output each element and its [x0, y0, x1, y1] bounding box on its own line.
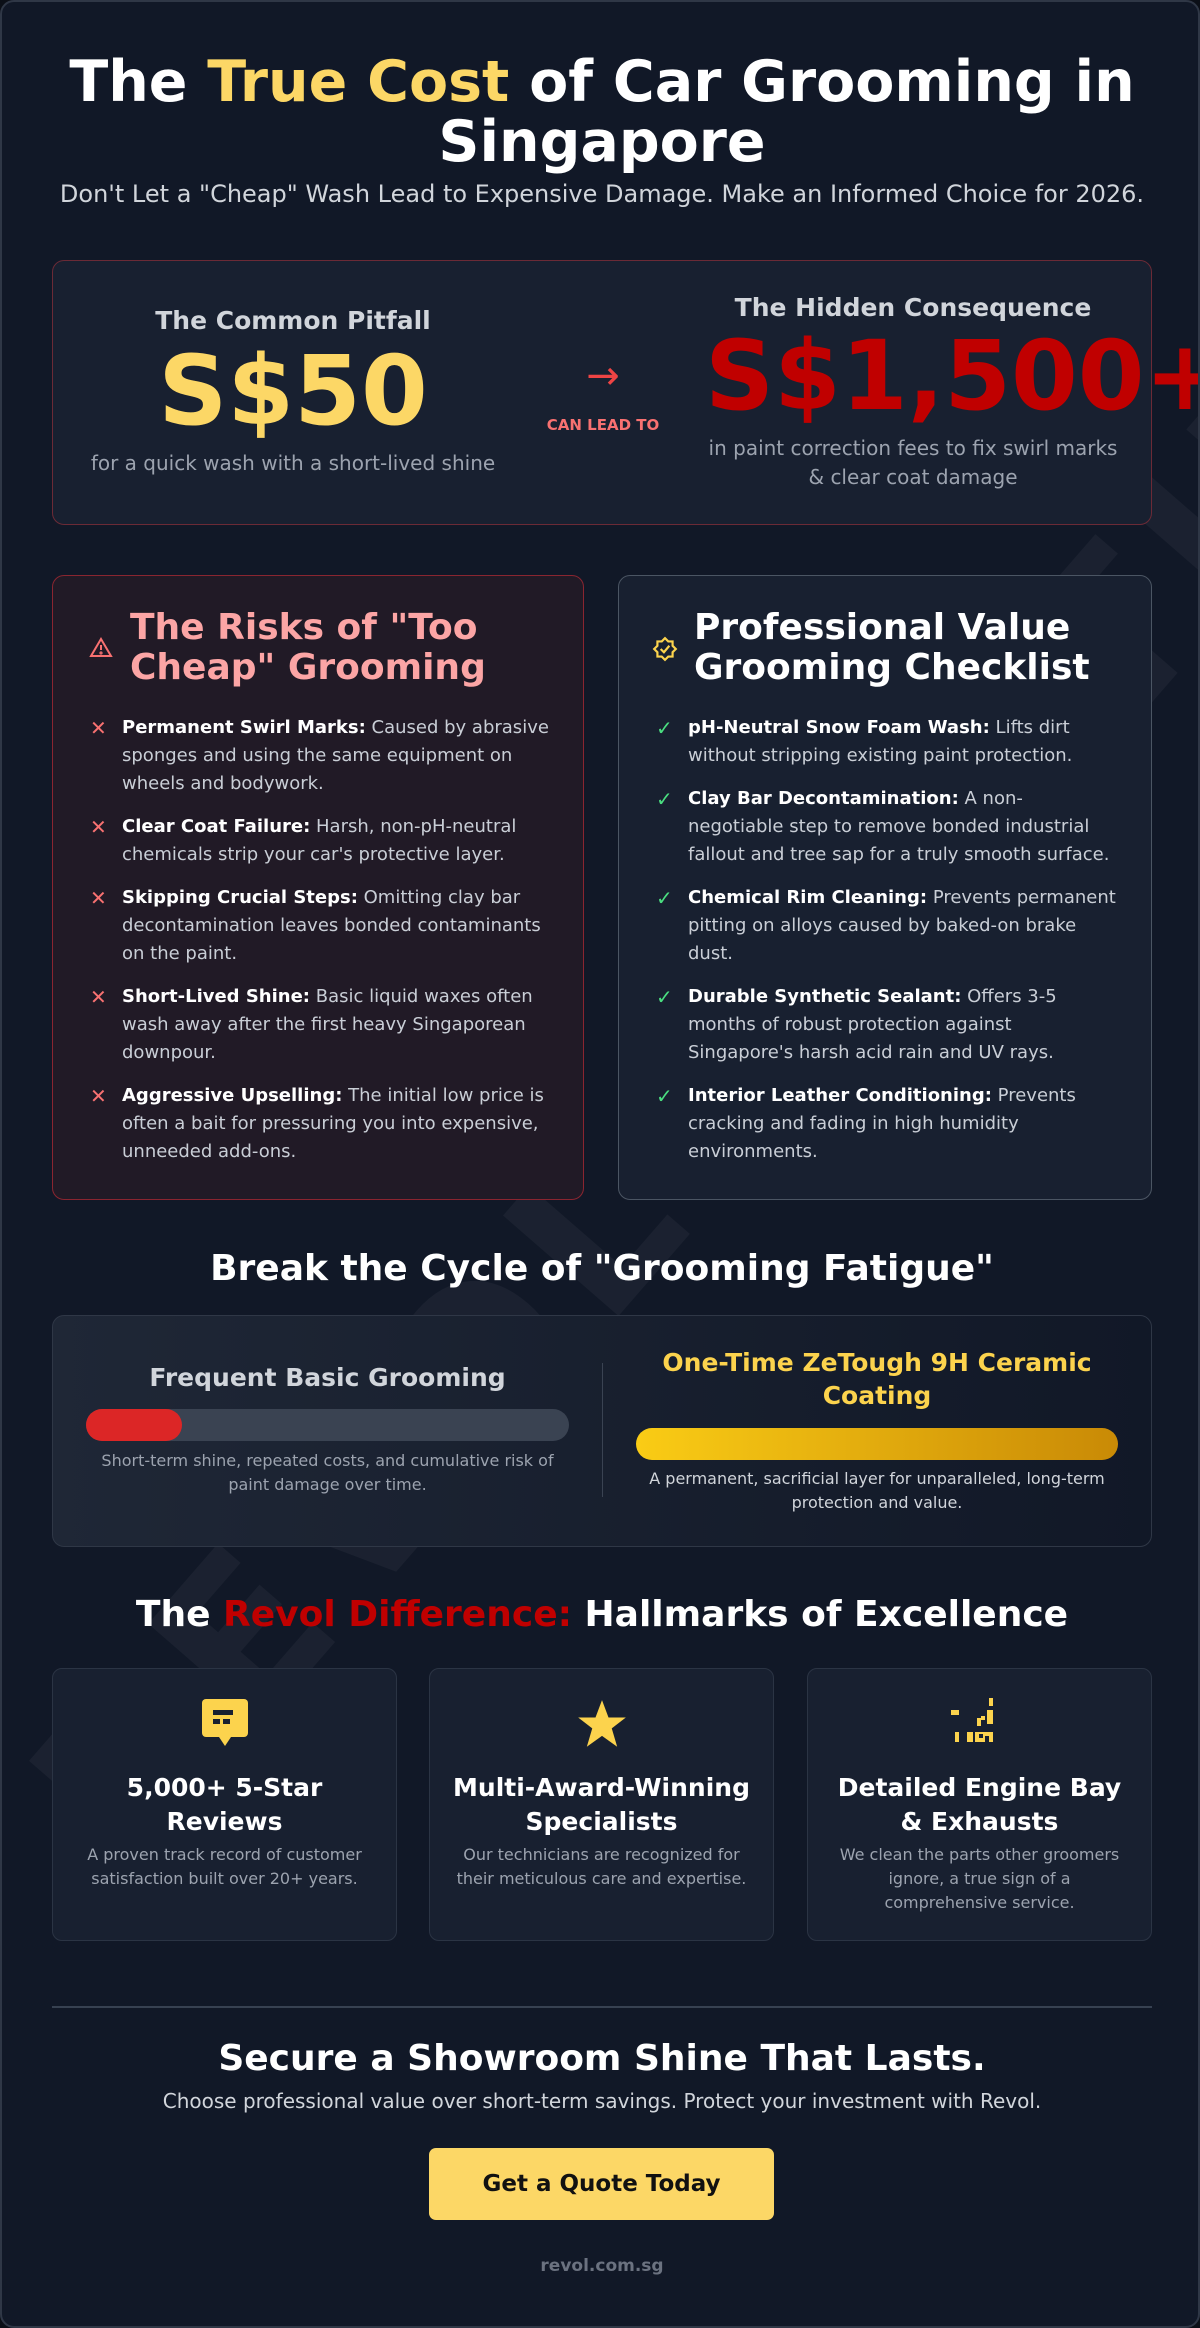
heading: risks — [130, 607, 486, 688]
card: reviews — [52, 1668, 397, 1941]
card: engine bay — [807, 1668, 1152, 1941]
heading: checklist: Professional Value — [694, 607, 1070, 648]
panel: checklist: ✓ — [656, 716, 673, 740]
footer url: revol.com.sg — [540, 2256, 664, 2276]
arrow: can lead to — [547, 353, 659, 434]
card: engine bay: We clean the parts other groomers ignore, a true sign of a comprehensive service. — [840, 1845, 1119, 1912]
common pitfall: for a quick wash with a short-lived shine — [91, 451, 495, 475]
panel: checklist — [618, 575, 1152, 1200]
checklist items: Interior Leather Conditioning: Prevents cracking and fading in high humidity environments. — [688, 1085, 1076, 1162]
card: reviews: Reviews — [166, 1807, 282, 1836]
title: Singapore — [438, 109, 766, 175]
icon: star — [578, 1700, 626, 1747]
heading: checklist: Grooming Checklist — [694, 647, 1090, 688]
heading: risks: The Risks of "Too — [130, 607, 477, 648]
ceramic coating: One-Time ZeTough 9H Ceramic — [662, 1348, 1092, 1377]
card: awards: Our technicians are recognized for their meticulous care and expertise. — [457, 1845, 746, 1888]
frequent basic grooming: paint damage over time. — [228, 1475, 427, 1494]
common pitfall: The Common Pitfall — [155, 306, 431, 335]
card: engine bay: Detailed Engine Bay — [838, 1773, 1121, 1802]
hidden consequence: in paint correction fees to fix swirl marks — [709, 436, 1117, 460]
risk list: Aggressive Upselling: The initial low price is often a bait for pressuring you into expensive, unneeded add-ons. — [122, 1085, 544, 1162]
icon: warning — [89, 637, 113, 657]
card: awards — [429, 1668, 774, 1941]
heading: break the cycle: Break the Cycle of "Grooming Fatigue" — [210, 1248, 994, 1289]
panel: risks: ✕ — [90, 886, 107, 910]
hidden consequence: & clear coat damage — [808, 465, 1018, 489]
card: reviews: 5,000+ 5-Star — [127, 1773, 322, 1802]
panel: checklist: ✓ — [656, 886, 673, 910]
button: get a quote — [429, 2148, 774, 2220]
icon: badge check — [652, 636, 678, 662]
arrow: can lead to: → — [586, 353, 620, 399]
ceramic coating: A permanent, sacrificial layer for unparalleled, long-term — [649, 1469, 1105, 1488]
risk list: Short-Lived Shine: Basic liquid waxes often wash away after the first heavy Singaporean downpour. — [122, 986, 533, 1063]
button: get a quote: Get a Quote Today — [482, 2171, 721, 2197]
frequent basic grooming — [86, 1363, 569, 1494]
card: engine bay: & Exhausts — [901, 1807, 1058, 1836]
panel: checklist: ✓ — [656, 1084, 673, 1108]
risk list: Skipping Crucial Steps: Omitting clay bar decontamination leaves bonded contaminants on the paint. — [122, 887, 541, 964]
checklist items: pH-Neutral Snow Foam Wash: Lifts dirt without stripping existing paint protection. — [688, 717, 1072, 766]
panel: risks: ✕ — [90, 815, 107, 839]
checklist items: Clay Bar Decontamination: A non-negotiable step to remove bonded industrial fallout and tree sap for a truly smooth surface. — [688, 788, 1109, 865]
panel: risks: ✕ — [90, 985, 107, 1009]
common pitfall: S$50 — [158, 335, 428, 447]
icon: review bubble — [202, 1699, 248, 1746]
ceramic coating: Coating — [823, 1381, 931, 1410]
panel: risks: ✕ — [90, 716, 107, 740]
common pitfall — [91, 306, 495, 475]
panel: risks — [52, 575, 584, 1200]
heading: checklist — [694, 607, 1090, 688]
ceramic coating: protection and value. — [792, 1493, 962, 1512]
title — [69, 49, 1135, 175]
heading: risks: Cheap" Grooming — [130, 647, 486, 688]
subtitle: Don't Let a "Cheap" Wash Lead to Expensive Damage. Make an Informed Choice for 2026. — [60, 180, 1144, 208]
risk list — [90, 716, 549, 1162]
frequent basic grooming: Short-term shine, repeated costs, and cumulative risk of — [101, 1451, 554, 1470]
ceramic coating — [636, 1348, 1118, 1512]
bar: short-term — [86, 1409, 569, 1441]
card: reviews: A proven track record of customer satisfaction built over 20+ years. — [87, 1845, 362, 1888]
closing heading: Secure a Showroom Shine That Lasts. — [218, 2038, 986, 2079]
panel: checklist: ✓ — [656, 787, 673, 811]
panel: cost comparison — [52, 260, 1152, 525]
risk list: Permanent Swirl Marks: Caused by abrasive sponges and using the same equipment on wheels and bodywork. — [122, 717, 549, 794]
hidden consequence: The Hidden Consequence — [735, 293, 1091, 322]
checklist items: Durable Synthetic Sealant: Offers 3-5 months of robust protection against Singapore's harsh acid rain and UV rays. — [688, 986, 1057, 1063]
hidden consequence — [705, 293, 1200, 489]
frequent basic grooming: Frequent Basic Grooming — [149, 1363, 506, 1392]
panel: comparison bars — [52, 1315, 1152, 1547]
checklist items — [656, 716, 1116, 1162]
closing text: Choose professional value over short-term savings. Protect your investment with Revol. — [163, 2089, 1041, 2113]
icon: engine — [951, 1698, 993, 1742]
card: awards: Specialists — [526, 1807, 677, 1836]
panel: risks: ✕ — [90, 1084, 107, 1108]
arrow: can lead to: CAN LEAD TO — [547, 416, 659, 434]
panel: checklist: ✓ — [656, 985, 673, 1009]
risk list: Clear Coat Failure: Harsh, non-pH-neutral chemicals strip your car's protective layer. — [122, 816, 516, 865]
title: The True Cost of Car Grooming in — [69, 49, 1135, 115]
checklist items: Chemical Rim Cleaning: Prevents permanent pitting on alloys caused by baked-on brake dust. — [688, 887, 1116, 964]
heading: revol difference: The Revol Difference: Hallmarks of Excellence — [136, 1594, 1068, 1635]
bar: long-term — [636, 1428, 1118, 1460]
card: awards: Multi-Award-Winning — [453, 1773, 750, 1802]
